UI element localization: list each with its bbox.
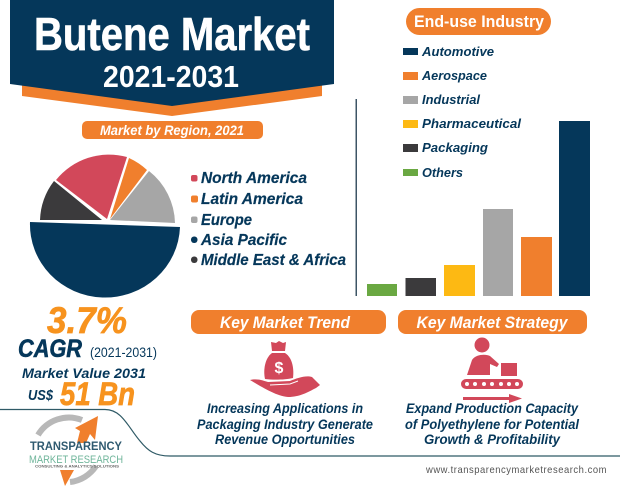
market value stat: Market Value 2031 (22, 365, 146, 381)
bar chart legend: Pharmaceutical (422, 116, 521, 131)
text: key market strategy description (405, 401, 579, 447)
heading: key market trend (191, 310, 386, 334)
CAGR stat: 3.7% (47, 300, 127, 341)
title banner: 2021-2031 (103, 59, 239, 94)
title banner (10, 0, 334, 116)
text: key market strategy description: Growth & Profitability (424, 432, 561, 447)
pie legend: Asia Pacific (200, 232, 287, 249)
text: key market trend description (197, 401, 373, 447)
CAGR stat (18, 300, 157, 363)
text: key market trend description: Packaging Industry Generate (197, 417, 373, 432)
text: key market strategy description: Expand Production Capacity (406, 401, 579, 416)
text: key market strategy description: of Polyethylene for Potential (405, 417, 579, 432)
text: key market trend description: Revenue Opportunities (215, 432, 355, 447)
heading: key market trend: Key Market Trend (220, 313, 351, 332)
heading: key market strategy: Key Market Strategy (416, 313, 569, 332)
pie legend: North America (201, 170, 307, 187)
bar chart legend: Industrial (422, 92, 480, 107)
pie chart (30, 155, 180, 298)
pie legend: Europe (201, 212, 252, 229)
icon: money bag on hand: $ (275, 360, 284, 377)
bar chart legend (403, 44, 521, 180)
market value stat: 51 Bn (60, 376, 135, 412)
bar chart legend: Aerospace (421, 68, 487, 83)
icon: worker with conveyor (461, 338, 523, 403)
icon: money bag on hand (250, 341, 320, 397)
heading: key market strategy (398, 310, 587, 334)
pie legend: Middle East & Africa (201, 252, 346, 269)
heading: end-use industry (406, 8, 551, 35)
heading: market by region: Market by Region, 2021 (100, 122, 244, 138)
market value stat: US$ (28, 387, 54, 404)
logo: Transparency Market Research: TRANSPARENCY (30, 441, 122, 453)
bar chart legend: Packaging (422, 140, 488, 155)
market value stat (22, 365, 146, 412)
heading: end-use industry: End-use Industry (414, 12, 544, 31)
bar chart legend: Automotive (421, 44, 494, 59)
CAGR stat: CAGR (18, 335, 82, 363)
CAGR stat: (2021-2031) (90, 345, 157, 360)
text: key market trend description: Increasing Applications in (207, 401, 363, 416)
pie legend (191, 170, 346, 269)
logo: Transparency Market Research (29, 416, 123, 486)
logo: Transparency Market Research: MARKET RESEARCH (29, 454, 123, 466)
pie legend: Latin America (201, 191, 303, 208)
bar chart (356, 99, 590, 296)
bar chart legend: Others (422, 165, 463, 180)
logo: Transparency Market Research: CONSULTING & ANALYTICS SOLUTIONS (35, 464, 120, 468)
title banner: Butene Market (34, 8, 310, 60)
